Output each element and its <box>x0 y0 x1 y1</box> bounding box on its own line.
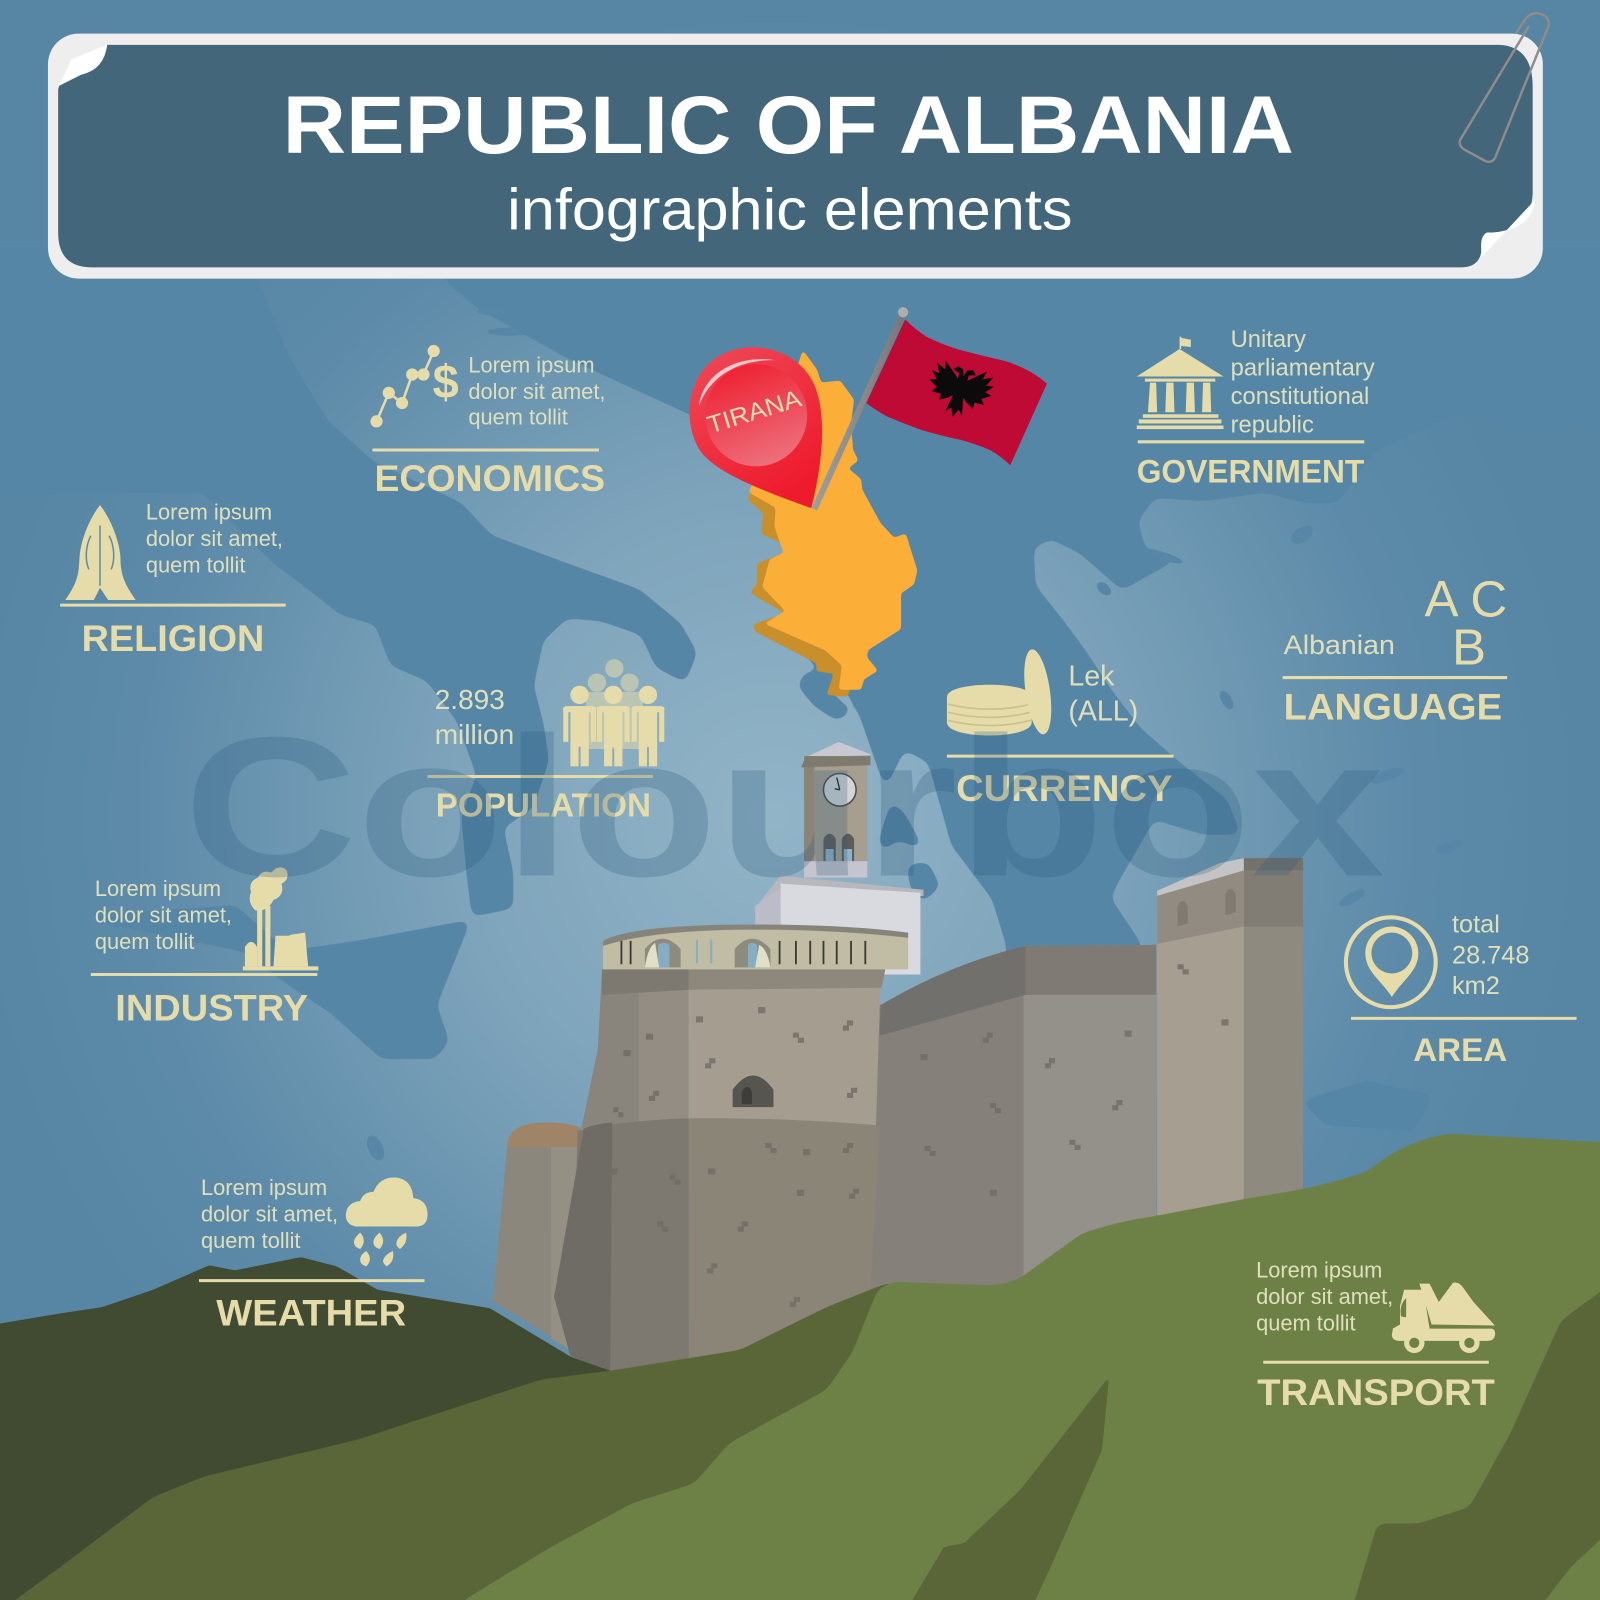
icon: eagle <box>922 358 997 425</box>
icon: rain cloud <box>346 1177 428 1266</box>
watermark: Colourbox <box>184 697 1385 919</box>
title banner <box>48 34 1543 279</box>
paperclip <box>1460 13 1549 162</box>
hill: dark back <box>0 1257 653 1600</box>
economics text: quem tollit <box>468 404 568 429</box>
arched window <box>733 1076 773 1107</box>
government label: GOVERNMENT <box>1137 453 1364 490</box>
economics text: dolor sit amet, <box>468 379 605 404</box>
area text: km2 <box>1452 972 1500 1000</box>
area text: 28.748 <box>1452 941 1529 969</box>
right tower <box>1157 858 1303 1235</box>
transport text: dolor sit amet, <box>1256 1284 1393 1309</box>
panel: currency <box>947 648 1173 809</box>
currency text: Lek <box>1068 661 1115 693</box>
stone bricks <box>597 964 1229 1307</box>
government text: constitutional <box>1231 383 1369 410</box>
industry label: INDUSTRY <box>115 987 308 1028</box>
panel: population <box>428 659 664 824</box>
icon: coins <box>947 648 1056 736</box>
panel: transport <box>1256 1258 1495 1413</box>
balustrade <box>603 924 908 969</box>
icon: people <box>563 659 664 766</box>
panel: economics <box>370 345 605 499</box>
industry text: dolor sit amet, <box>95 902 232 927</box>
pin label: TIRANA <box>704 385 805 439</box>
icon: chart and dollar <box>370 345 459 428</box>
transport text: Lorem ipsum <box>1256 1258 1382 1283</box>
subtitle: infographic elements <box>507 178 1072 243</box>
area label: AREA <box>1413 1031 1507 1068</box>
icon: praying hands <box>65 505 136 600</box>
industry text: Lorem ipsum <box>95 876 221 901</box>
weather text: quem tollit <box>201 1228 301 1253</box>
transport label: TRANSPORT <box>1257 1372 1495 1413</box>
panel: religion <box>60 499 286 659</box>
icon: letters: A <box>1424 570 1459 627</box>
area text: total <box>1452 911 1500 939</box>
main round tower <box>554 924 908 1383</box>
language text: Albanian <box>1284 630 1395 660</box>
weather text: Lorem ipsum <box>201 1175 327 1200</box>
map pin: Tirana <box>689 347 822 508</box>
population figure: 2.893 <box>435 684 505 715</box>
weather text: dolor sit amet, <box>201 1201 338 1226</box>
religion text: quem tollit <box>146 552 245 577</box>
left small tower <box>493 1122 584 1357</box>
industry text: quem tollit <box>95 929 194 954</box>
icon: letters: C <box>1470 570 1507 627</box>
icon: location circle <box>1346 917 1436 1007</box>
middle wall <box>869 945 1156 1311</box>
religion label: RELIGION <box>82 618 264 659</box>
icon: letters: B <box>1452 618 1486 675</box>
icon: factory <box>243 867 318 970</box>
religion text: Lorem ipsum <box>146 499 272 524</box>
Albania map <box>748 352 916 697</box>
population label: POPULATION <box>436 787 651 824</box>
icon: parliament building <box>1137 337 1223 429</box>
economics text: Lorem ipsum <box>468 352 595 377</box>
flag <box>866 319 1047 465</box>
castle <box>493 742 1303 1383</box>
weather label: WEATHER <box>216 1293 406 1334</box>
government text: republic <box>1231 412 1314 439</box>
title heading: REPUBLIC OF ALBANIA <box>283 80 1294 171</box>
clock tower <box>801 742 872 878</box>
language label: LANGUAGE <box>1284 686 1502 727</box>
icon: dump truck <box>1392 1283 1495 1353</box>
panel: weather <box>199 1175 428 1334</box>
religion text: dolor sit amet, <box>146 526 283 551</box>
currency text: (ALL) <box>1068 695 1138 727</box>
population figure: million <box>435 719 514 750</box>
icon: chart and dollar: $ <box>433 356 459 408</box>
currency label: CURRENCY <box>956 768 1172 809</box>
flag pole <box>814 307 908 509</box>
panel: industry <box>91 867 318 1028</box>
panel: government <box>1137 326 1375 490</box>
panel: language <box>1283 570 1507 727</box>
white building <box>754 876 923 974</box>
panel: area <box>1346 911 1577 1068</box>
economics label: ECONOMICS <box>374 458 605 499</box>
hill: front <box>439 1134 1600 1600</box>
government text: Unitary <box>1231 326 1306 353</box>
transport text: quem tollit <box>1256 1311 1356 1336</box>
hill: middle <box>0 1282 1020 1600</box>
government text: parliamentary <box>1231 355 1375 382</box>
